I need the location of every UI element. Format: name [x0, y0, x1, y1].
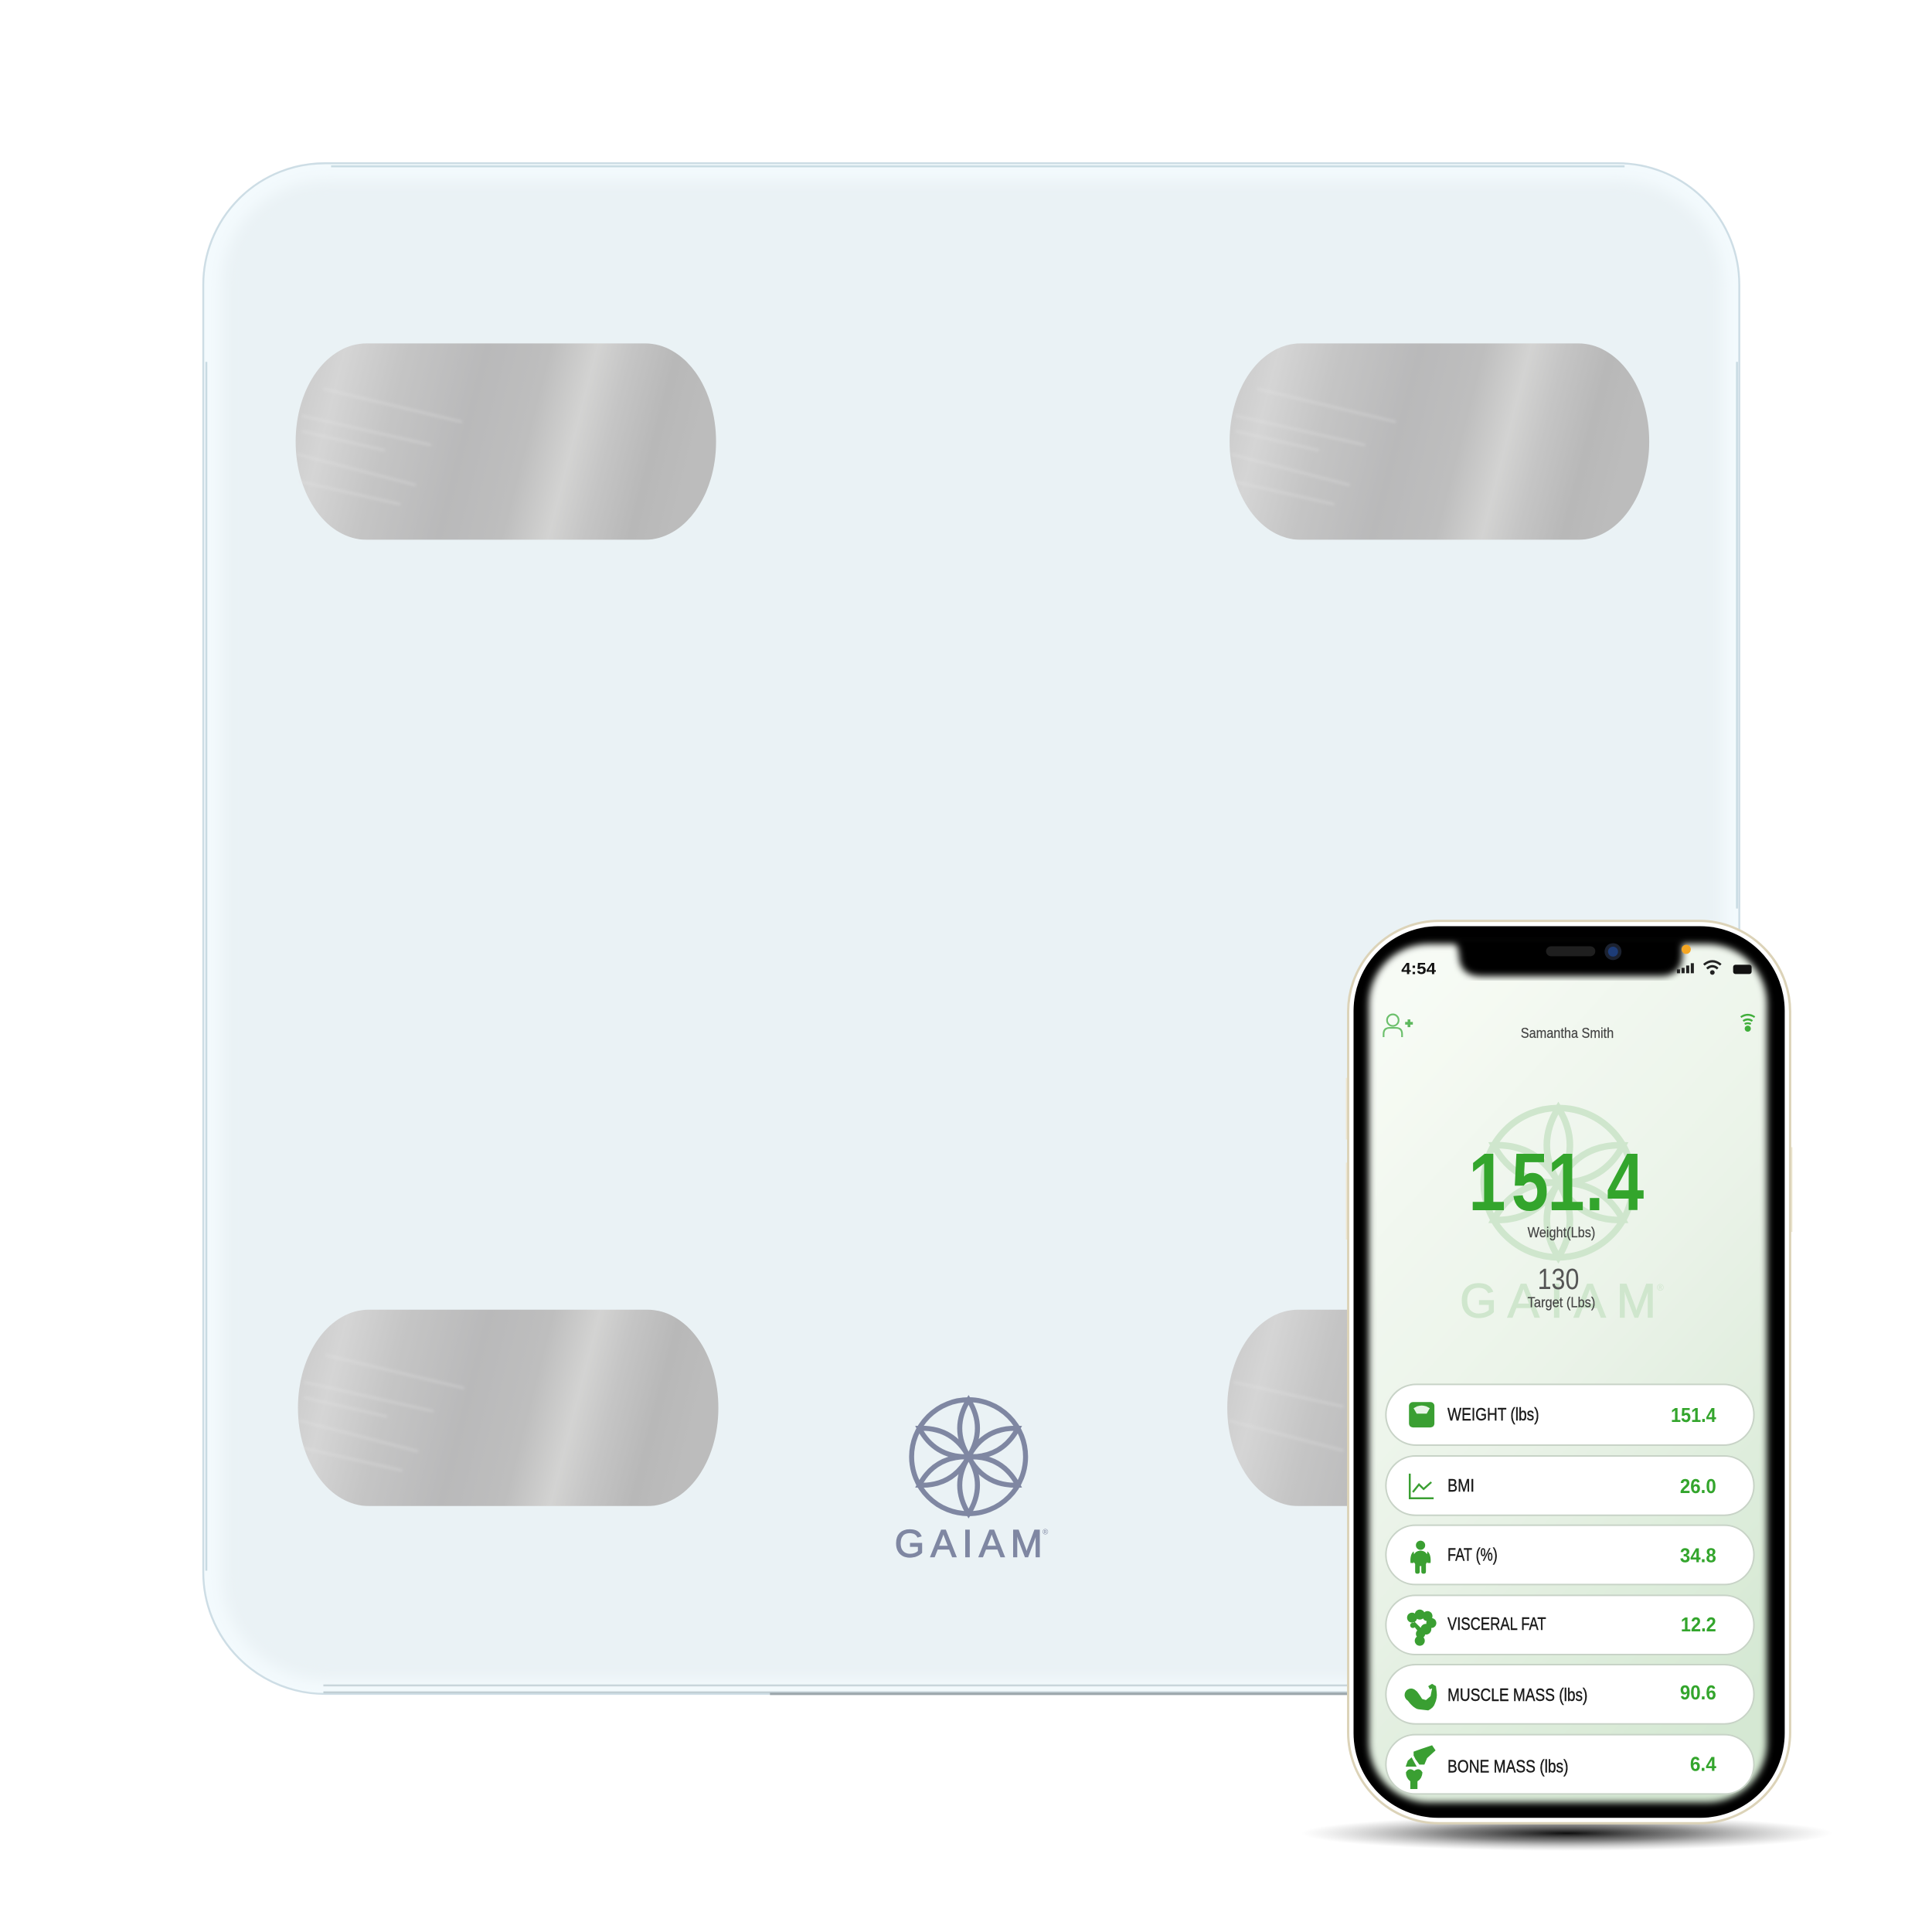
sensor pad: bottom left: [298, 1310, 719, 1506]
row: weight: WEIGHT (lbs): [1447, 1404, 1539, 1424]
target label: Target (Lbs): [1528, 1295, 1595, 1311]
phone frame: [1346, 921, 1792, 1823]
row: bone mass: 6.4: [1690, 1753, 1716, 1775]
user name: Samantha Smith: [1521, 1025, 1614, 1041]
smartphone: [1346, 921, 1792, 1823]
row: bone mass: BONE MASS (lbs): [1447, 1756, 1568, 1776]
weight label: Weight(Lbs): [1528, 1225, 1595, 1241]
speaker: [1546, 946, 1595, 956]
wifi sensor icon: [1741, 1015, 1755, 1032]
row: muscle mass: MUSCLE MASS (lbs): [1447, 1685, 1587, 1705]
sensor pad: top right: [1230, 343, 1649, 539]
Gaiam logo on scale: ®: [1043, 1529, 1049, 1537]
target value: 130: [1538, 1264, 1579, 1296]
status bar: [1401, 944, 1752, 978]
weight reading: 151.4: [1468, 1138, 1645, 1228]
row: fat: 34.8: [1680, 1545, 1716, 1566]
phone ground shadow: [1301, 1815, 1832, 1851]
row: fat: FAT (%): [1447, 1545, 1498, 1565]
watermark logo: [1460, 1108, 1664, 1328]
row: muscle mass: [1386, 1665, 1754, 1724]
row: BMI: [1386, 1456, 1754, 1515]
row: visceral fat: VISCERAL FAT: [1447, 1614, 1546, 1634]
watermark logo: ®: [1657, 1282, 1664, 1293]
camera: [1604, 943, 1621, 960]
watermark logo: GAIAM: [1460, 1275, 1656, 1328]
row: visceral fat: 12.2: [1681, 1614, 1716, 1636]
row: visceral fat: [1386, 1595, 1754, 1655]
row: muscle mass: 90.6: [1680, 1682, 1716, 1704]
status bar: 4:54: [1401, 960, 1436, 978]
row: bone mass: [1386, 1735, 1754, 1794]
row: BMI: 26.0: [1680, 1476, 1716, 1498]
row: BMI: BMI: [1447, 1475, 1475, 1495]
smart scale body: [203, 163, 1740, 1694]
Gaiam logo on scale: [895, 1400, 1049, 1566]
full composition: [203, 163, 1832, 1851]
row: fat: [1386, 1526, 1754, 1584]
row: weight: 151.4: [1671, 1405, 1716, 1427]
row: weight: [1386, 1384, 1754, 1445]
sensor pad: bottom right: [1227, 1310, 1648, 1506]
sensor pad: top left: [296, 343, 716, 539]
add user icon: [1383, 1015, 1413, 1037]
phone screen: [1369, 936, 1767, 1802]
Gaiam logo on scale: GAIAM: [895, 1522, 1043, 1566]
